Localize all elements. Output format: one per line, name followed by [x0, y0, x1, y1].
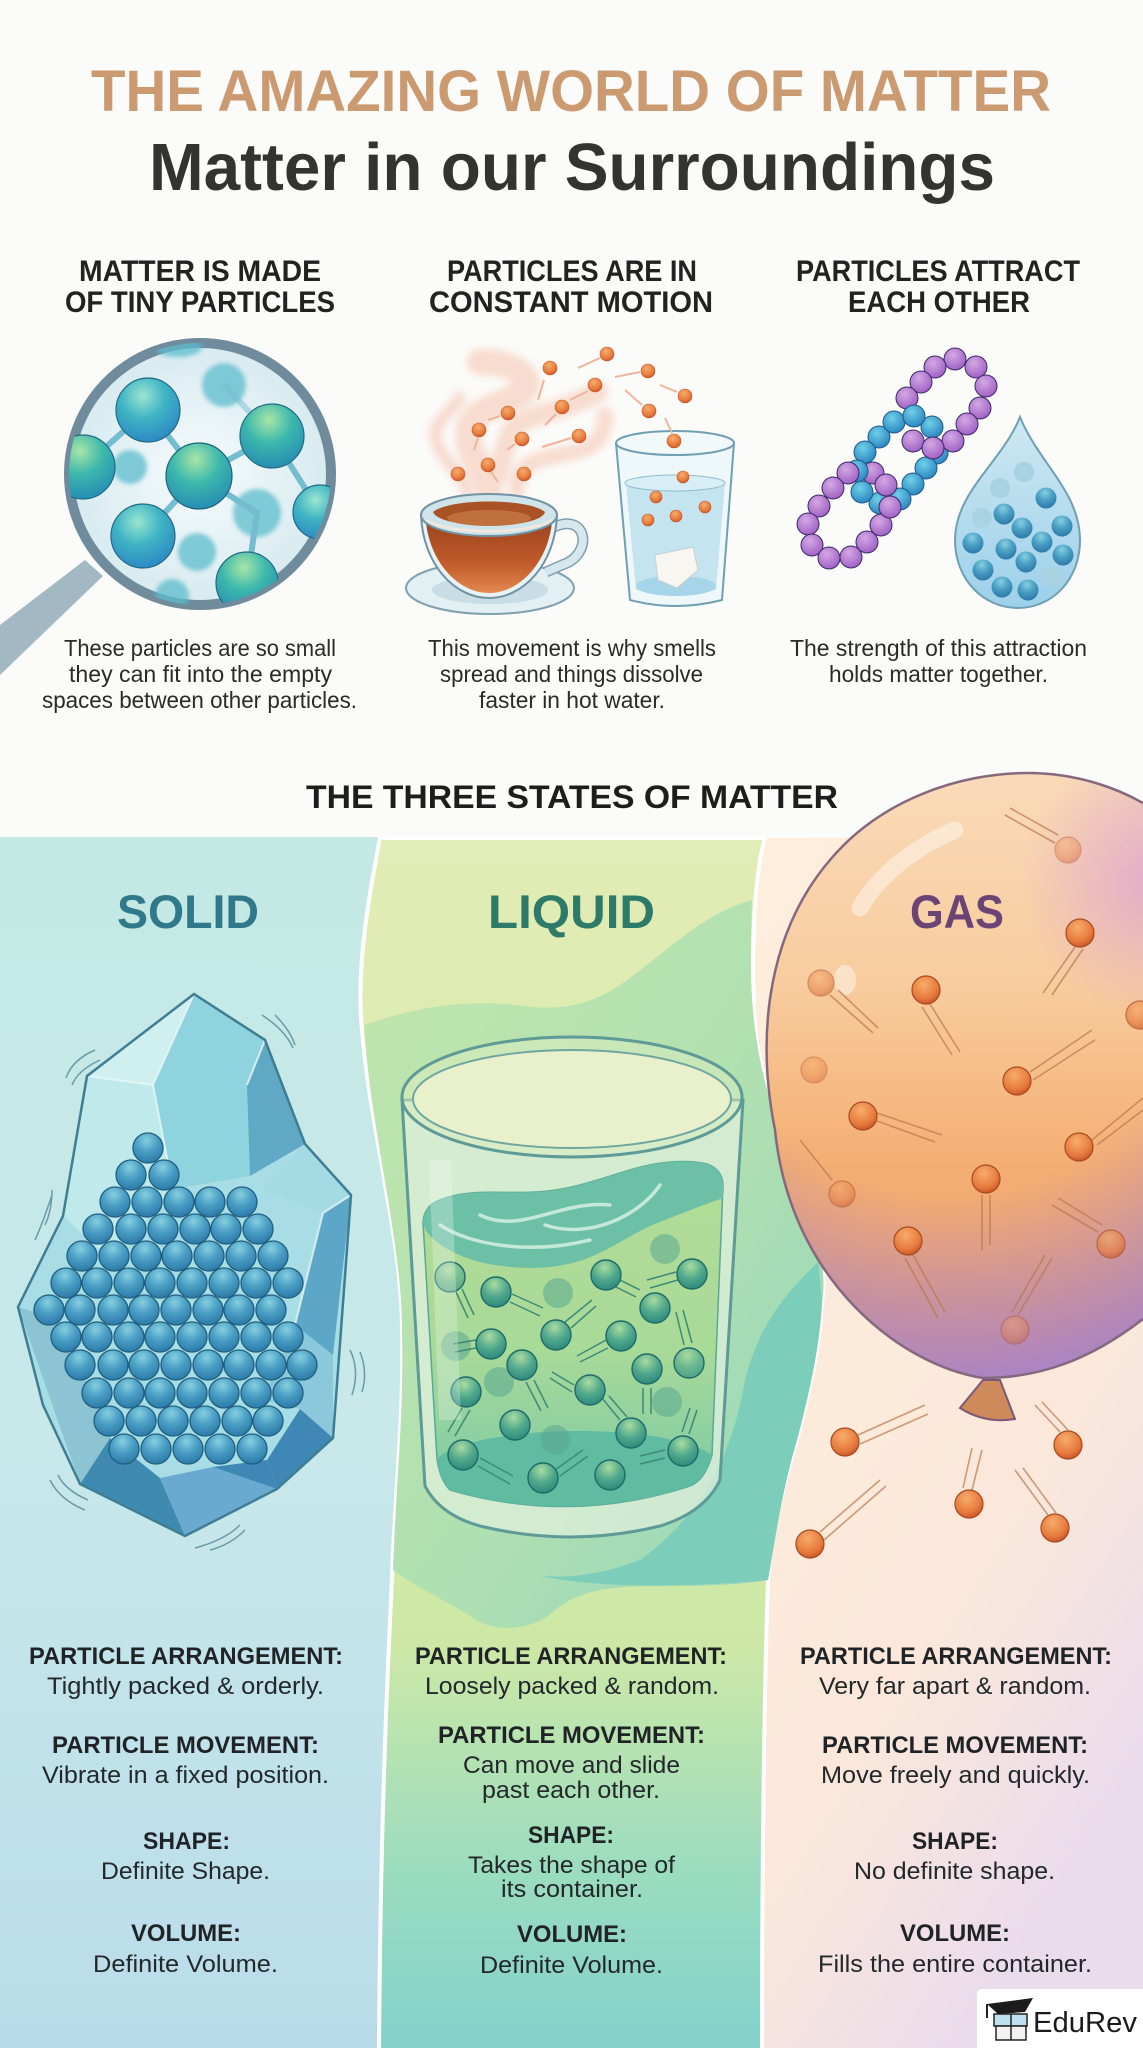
icon: magnifying glass with molecules [0, 337, 347, 675]
heading: particles attract each other: PARTICLES ATTRACT [796, 255, 1080, 288]
text: tiny particles description [42, 635, 357, 713]
heading: matter is made of tiny particles [65, 255, 335, 319]
text: tiny particles description: These particles are so small [64, 635, 336, 661]
text: gas properties: PARTICLE MOVEMENT: [822, 1732, 1088, 1759]
text: solid properties: Definite Shape. [101, 1858, 270, 1885]
motion trails [800, 808, 1143, 1540]
text: solid properties: Definite Volume. [93, 1951, 278, 1978]
panel: solid [0, 837, 420, 2048]
text: solid properties: VOLUME: [131, 1920, 241, 1947]
title: the amazing world of matter: THE AMAZING WORLD OF MATTER [91, 59, 1051, 124]
label: solid: SOLID [117, 885, 259, 938]
logo: EduRev [977, 1989, 1143, 2048]
text: gas properties: Very far apart & random. [819, 1673, 1091, 1700]
heading: matter is made of tiny particles: MATTER IS MADE [79, 255, 321, 288]
panel: gas background [753, 837, 1143, 2048]
text: gas properties: Move freely and quickly. [821, 1762, 1090, 1789]
panel: gas [767, 773, 1143, 1978]
heading: particles are in constant motion: PARTICLES ARE IN [447, 255, 697, 288]
text: solid properties: Vibrate in a fixed position. [42, 1762, 329, 1789]
text: attraction description: holds matter together. [829, 661, 1048, 687]
text: attraction description: The strength of this attraction [790, 635, 1087, 661]
text: liquid properties: SHAPE: [528, 1822, 614, 1849]
background wave shape [364, 900, 824, 1628]
heading: the three states of matter: THE THREE STATES OF MATTER [306, 779, 838, 815]
particles: tightly packed spheres [34, 1133, 317, 1464]
text: solid properties: SHAPE: [143, 1828, 230, 1855]
icon: water drop with beads [955, 417, 1080, 608]
text: gas properties: VOLUME: [900, 1920, 1010, 1947]
text: liquid properties: PARTICLE ARRANGEMENT: [415, 1643, 727, 1670]
illustration: balloon [767, 773, 1143, 1420]
text: gas properties [800, 1643, 1112, 1978]
heading: particles are in constant motion: CONSTANT MOTION [429, 286, 713, 319]
text: constant motion description: This movement is why smells [428, 635, 716, 661]
text: gas properties: PARTICLE ARRANGEMENT: [800, 1643, 1112, 1670]
text: gas properties: No definite shape. [854, 1858, 1055, 1885]
particles: far-apart orange spheres [796, 837, 1143, 1558]
solid background [0, 837, 420, 2048]
text: constant motion description [428, 635, 716, 713]
heading: particles attract each other: EACH OTHER [848, 286, 1030, 319]
text: liquid properties: Loosely packed & random. [425, 1673, 719, 1700]
teal wave shape [540, 1262, 822, 1586]
text: constant motion description: faster in hot water. [479, 687, 665, 713]
text: liquid properties [415, 1643, 727, 1979]
label: gas: GAS [910, 885, 1004, 938]
illustration: ice crystal [18, 994, 365, 1550]
heading: particles attract each other [796, 255, 1080, 319]
icon: particle trails [474, 358, 677, 482]
panel: tiny particles [0, 255, 357, 713]
heading: particles are in constant motion [429, 255, 713, 319]
text: attraction description [790, 635, 1087, 687]
text: liquid properties: VOLUME: [517, 1921, 627, 1948]
text: gas properties: SHAPE: [912, 1828, 998, 1855]
text: liquid properties: Definite Volume. [480, 1952, 663, 1979]
text: liquid properties: Can move and slide [463, 1752, 680, 1779]
heading: matter is made of tiny particles: OF TINY PARTICLES [65, 286, 335, 319]
text: constant motion description: spread and things dissolve [440, 661, 703, 687]
text: liquid properties: its container. [501, 1876, 643, 1903]
panel: constant motion [406, 255, 734, 713]
text: gas properties: Fills the entire container. [818, 1951, 1092, 1978]
text: solid properties: Tightly packed & orderly. [47, 1673, 324, 1700]
label: liquid: LIQUID [488, 885, 655, 938]
icon: glass of water with sugar cube [616, 431, 734, 606]
text: tiny particles description: they can fit into the empty [69, 661, 332, 687]
icon: graduation cap with book [987, 1998, 1033, 2040]
text: liquid properties: PARTICLE MOVEMENT: [438, 1722, 705, 1749]
illustration: glass of green liquid [402, 1037, 743, 1537]
panel: liquid [360, 838, 824, 2048]
text: tiny particles description: spaces between other particles. [42, 687, 357, 713]
icon: moving orange particles [451, 347, 711, 526]
text: solid properties: PARTICLE MOVEMENT: [52, 1732, 319, 1759]
icon: cup of tea on saucer [406, 494, 583, 614]
logo wordmark: EduRev [1033, 2007, 1138, 2039]
text: liquid properties: past each other. [482, 1777, 660, 1804]
subtitle: matter in our surroundings: Matter in our Surroundings [149, 130, 995, 205]
liquid background [360, 838, 824, 2048]
text: liquid properties: Takes the shape of [468, 1852, 675, 1879]
text: solid properties [29, 1643, 343, 1978]
text: solid properties: PARTICLE ARRANGEMENT: [29, 1643, 343, 1670]
icon: chain of beads [797, 348, 997, 569]
icon: steam swirls [436, 362, 605, 500]
panel: particles attract [790, 255, 1087, 687]
